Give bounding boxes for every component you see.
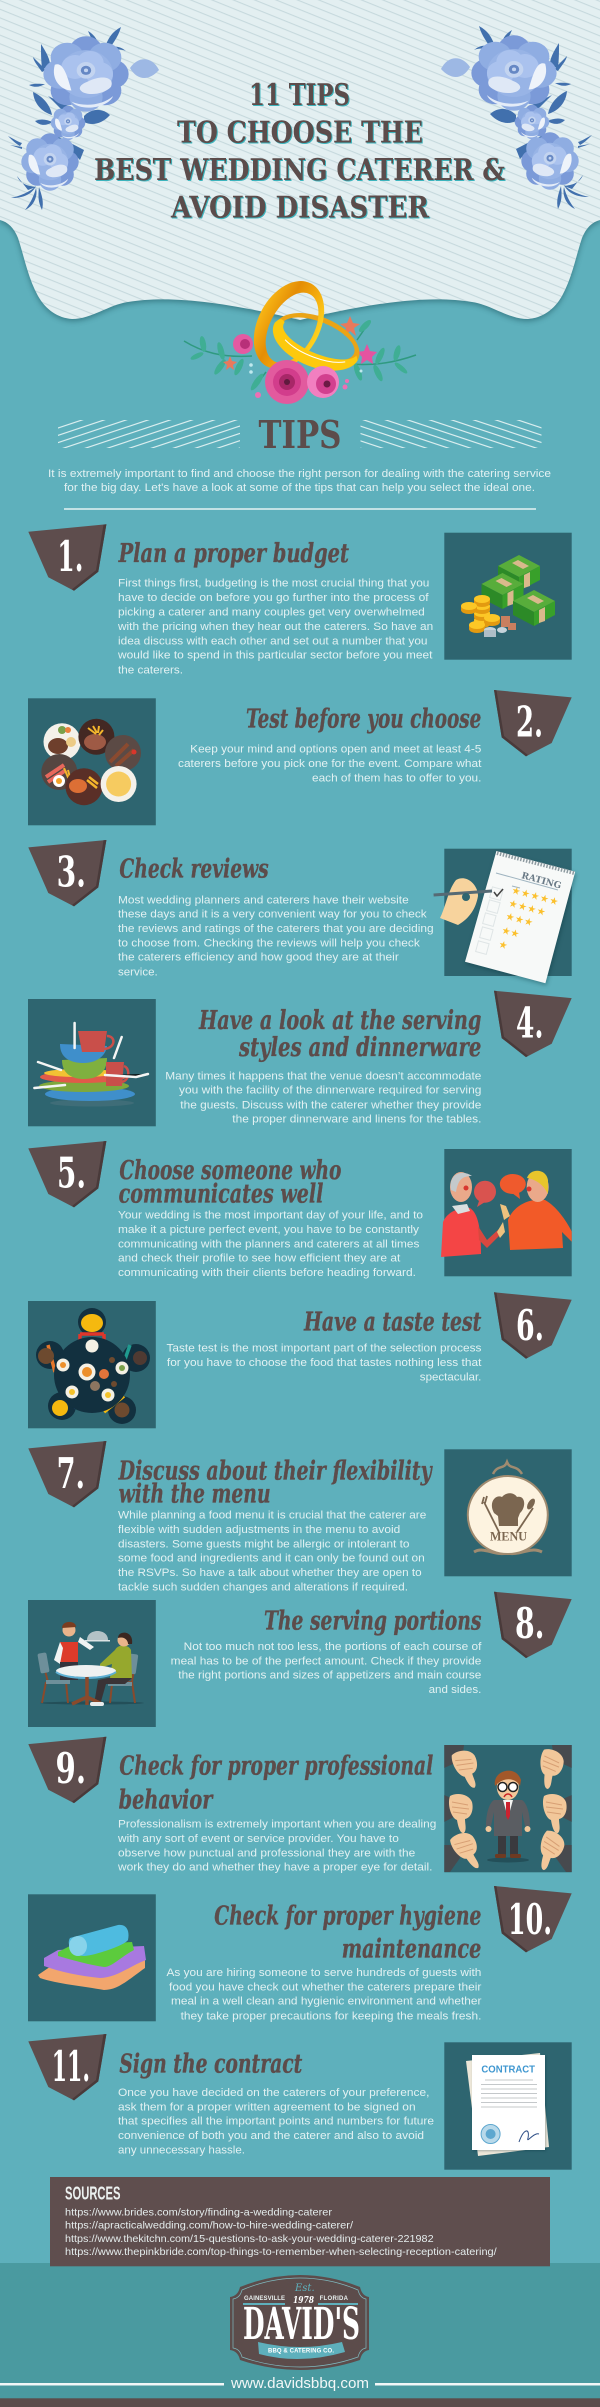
body 11: ask them for a proper written agreement to be signed on — [118, 2101, 416, 2113]
body 10: meal in a well clean and hygienic environment and whether — [171, 1996, 482, 2008]
logo: David's BBQ & Catering Co.: 1978 — [293, 2296, 315, 2306]
header wave panel — [0, 0, 600, 320]
website line: www.davidsbbq.com — [230, 2375, 369, 2392]
body 8: Not too much not too less, the portions of each course of — [184, 1641, 482, 1653]
image: dining table from above — [28, 1301, 156, 1428]
body 10: food you have check out whether the caterers prepare their — [169, 1981, 482, 1993]
heading 4 — [198, 1006, 481, 1063]
body 1: have to decide on before you go further into the process of — [118, 592, 430, 604]
image: menu badge — [444, 1449, 572, 1576]
body 7: disasters. Some guests might be allergic or intolerant to — [118, 1538, 410, 1550]
body 7: tackle such sudden changes and alterations if required. — [118, 1581, 408, 1593]
image: food plates — [28, 698, 156, 825]
heading 7: with the menu — [119, 1480, 271, 1510]
image: contract paper: CONTRACT — [481, 2065, 535, 2076]
image: rating sheet — [434, 849, 575, 983]
tip 3 panel — [28, 840, 575, 983]
body 1 — [117, 578, 433, 676]
title — [94, 78, 505, 225]
image: rating sheet: ★★★ — [504, 911, 534, 929]
logo: David's BBQ & Catering Co.: BBQ & CATERING CO. — [268, 2348, 334, 2354]
body 5: communicating with their clients before heading forward. — [118, 1267, 416, 1279]
heading 3: Check reviews — [119, 855, 269, 885]
heading 7 — [118, 1456, 433, 1510]
body 10: they take proper precautions for keeping the meals fresh. — [181, 2010, 481, 2022]
logo: David's BBQ & Catering Co.: Est. — [294, 2283, 315, 2294]
icon: blue floral left — [8, 27, 159, 210]
body 2: caterers before you pick one for the event. Compare what — [178, 758, 481, 770]
body 11: any unnecessary hassle. — [118, 2144, 245, 2156]
number badge 11: 11. — [52, 2042, 90, 2091]
heading 5: Choose someone who — [119, 1156, 341, 1186]
body 1: with the pricing when they hear out the caterers. So have an — [117, 621, 433, 633]
body 7: the RSVPs. So have a talk about whether they are open to — [118, 1567, 422, 1579]
heading 4: styles and dinnerware — [238, 1033, 481, 1063]
body 10 — [166, 1967, 482, 2022]
title: AVOID DISASTER — [170, 190, 430, 225]
title: 11 TIPS — [249, 78, 350, 113]
body 11: Once you have decided on the caterers of your preference, — [118, 2087, 429, 2099]
tip 7 panel — [28, 1441, 572, 1593]
number badge 5 — [28, 1141, 106, 1207]
body 4: the proper dinnerware and linens for the tables. — [232, 1114, 481, 1126]
number badge 6: 6. — [516, 1301, 544, 1350]
tip 6 panel — [28, 1292, 572, 1428]
sources heading: SOURCES — [65, 2183, 120, 2203]
image: rating sheet: ★★★★ — [507, 898, 547, 919]
number badge 10: 10. — [508, 1895, 552, 1944]
body 5: communicating with the planners and caterers at all times — [118, 1238, 420, 1250]
body 11: that specifies all the important points and numbers for future — [118, 2116, 434, 2128]
intro text: It is extremely important to find and choose the right person for dealing with the catering service — [48, 468, 551, 480]
body 3: to choose from. Checking the reviews will help you check — [118, 937, 420, 949]
number badge 7 — [28, 1441, 106, 1507]
body 6: for you have to choose the food that tastes nothing less that — [167, 1357, 481, 1369]
heading 8: The serving portions — [264, 1606, 482, 1636]
image: money stacks — [444, 533, 572, 660]
tip 1 panel — [28, 524, 572, 676]
image: menu badge: MENU — [490, 1529, 528, 1544]
body 2: each of them has to offer to you. — [312, 773, 481, 785]
number badge 11 — [28, 2034, 106, 2100]
tip 9 panel — [28, 1737, 572, 1874]
footer band — [0, 2263, 600, 2399]
tip 8 panel — [28, 1592, 572, 1727]
source links: https://www.brides.com/story/finding-a-wedding-caterer — [65, 2207, 333, 2219]
body 5: make it a picture perfect event, you have to be constantly — [118, 1224, 420, 1236]
logo: David's BBQ & Catering Co.: GAINESVILLE — [244, 2296, 285, 2302]
heading 4: Have a look at the serving — [198, 1006, 481, 1036]
heading 9: behavior — [119, 1785, 214, 1815]
body 10: As you are hiring someone to serve hundreds of guests with — [166, 1967, 481, 1979]
heading 9: Check for proper professional — [119, 1751, 433, 1781]
body 6 — [166, 1343, 482, 1383]
logo: David's BBQ & Catering Co. — [230, 2275, 369, 2370]
body 7: some food and ingredients and it can only be found out on — [118, 1553, 425, 1565]
intro text: for the big day. Let's have a look at some of the tips that can help you select the ideal one. — [64, 482, 535, 494]
image: rating sheet: ★ — [497, 939, 509, 952]
heading: tips with hatching: TIPS — [258, 413, 342, 458]
tip 4 panel — [28, 991, 572, 1126]
logo: David's BBQ & Catering Co.: DAVID'S — [243, 2299, 360, 2350]
body 9 — [117, 1819, 436, 1874]
body 6: Taste test is the most important part of the selection process — [166, 1343, 482, 1355]
number badge 6 — [494, 1292, 572, 1359]
body 1: the caterers. — [118, 664, 183, 676]
body 11 — [118, 2087, 434, 2156]
body 3: these days and it is a very convenient way for you to check — [118, 909, 427, 921]
intro text — [48, 468, 551, 494]
number badge 2: 2. — [516, 698, 543, 746]
body 1: picking a caterer and many couples get very overwhelmed — [118, 606, 425, 618]
number badge 1: 1. — [57, 532, 83, 581]
body 7 — [118, 1510, 426, 1593]
number badge 8: 8. — [515, 1599, 544, 1648]
image: waiter and guest at table — [28, 1600, 156, 1727]
body 7: While planning a food menu it is crucial that the caterer are — [118, 1510, 426, 1522]
heading 10: Check for proper hygiene — [214, 1901, 481, 1931]
title: TO CHOOSE THE — [177, 116, 423, 151]
heading 5 — [119, 1156, 341, 1209]
heading 5: communicates well — [119, 1179, 323, 1209]
body 1: idea discuss with each other and set out a number that you — [118, 635, 428, 647]
body 7: flexible with sudden adjustments in the menu to avoid — [118, 1524, 400, 1536]
body 1: would like to spend in this particular sector before you meet — [117, 650, 432, 662]
heading 11: Sign the contract — [119, 2050, 302, 2080]
body 6: spectacular. — [420, 1371, 481, 1383]
heading 6: Have a taste test — [303, 1308, 481, 1338]
number badge 3 — [28, 840, 106, 906]
body 4: Many times it happens that the venue doesn’t accommodate — [165, 1070, 481, 1082]
heading: tips with hatching — [58, 420, 542, 448]
image: folded towels — [28, 1894, 156, 2021]
source links: https://www.thepinkbride.com/top-things-to-remember-when-selecting-reception-catering/ — [65, 2246, 497, 2258]
body 9: Professionalism is extremely important when you are dealing — [118, 1819, 436, 1831]
number badge 10 — [494, 1886, 572, 1952]
body 11: convenience of both you and the caterer and also to avoid — [118, 2130, 424, 2142]
number badge 5: 5. — [57, 1148, 86, 1198]
footer bar — [0, 2398, 600, 2407]
tip 11 panel — [28, 2034, 572, 2170]
number badge 9: 9. — [56, 1744, 86, 1793]
body 5: and check their profile to see how efficient they are at — [118, 1253, 400, 1265]
image: rating sheet: RATING — [520, 871, 562, 891]
source links — [65, 2207, 497, 2258]
body 8 — [171, 1641, 482, 1696]
icon: blue floral right — [441, 26, 592, 209]
image: contract paper — [444, 2042, 572, 2170]
body 9: observe how punctual and professional they are with the — [118, 1847, 415, 1859]
body 1: First things first, budgeting is the most crucial thing that you — [118, 578, 429, 590]
body 8: and sides. — [429, 1684, 481, 1696]
body 9: with any sort of event or service provider. You have to — [117, 1833, 399, 1845]
body 8: the right portions and sizes of appetizers and main course — [178, 1670, 481, 1682]
image: rating sheet: ★★ — [500, 925, 520, 941]
body 4: you with the facility of the dinnerware required for serving — [179, 1085, 481, 1097]
body 3: service. — [118, 966, 158, 978]
number badge 1 — [28, 524, 106, 591]
body 5 — [118, 1210, 423, 1279]
body 5: Your wedding is the most important day of your life, and to — [118, 1210, 423, 1222]
heading 10: maintenance — [342, 1935, 481, 1965]
heading 2: Test before you choose — [246, 705, 481, 735]
heading 1: Plan a proper budget — [118, 539, 349, 569]
body 9: work they do and whether they have a proper eye for detail. — [117, 1862, 433, 1874]
source links: https://www.thekitchn.com/15-questions-to-ask-your-wedding-caterer-221982 — [65, 2233, 434, 2245]
body 3: the caterers efficiency and how good they are at their — [118, 952, 399, 964]
number badge 7: 7. — [57, 1449, 85, 1498]
logo: David's BBQ & Catering Co.: FLORIDA — [320, 2296, 349, 2302]
tip 2 panel — [28, 690, 572, 825]
heading 9 — [119, 1751, 433, 1815]
body 4: the guests. Discuss with the caterer whether they provide — [180, 1099, 481, 1111]
tip 10 panel — [28, 1886, 572, 2022]
image: stacked dishes — [28, 999, 156, 1126]
image: rating sheet: ★★★★★ — [510, 885, 559, 908]
number badge 9 — [28, 1737, 106, 1803]
body 3: Most wedding planners and caterers have their website — [118, 894, 409, 906]
number badge 4 — [494, 991, 572, 1057]
number badge 3: 3. — [57, 848, 86, 896]
tip 5 panel — [28, 1141, 572, 1279]
image: two people talking — [441, 1149, 572, 1276]
source links: https://apracticalwedding.com/how-to-hire-wedding-caterer/ — [65, 2220, 353, 2232]
body 2: Keep your mind and options open and meet at least 4-5 — [190, 744, 481, 756]
heading 7: Discuss about their flexibility — [118, 1456, 433, 1486]
image: man with thumbs down — [444, 1745, 572, 1874]
icon: wedding rings with flowers — [184, 269, 416, 404]
body 2 — [178, 744, 481, 785]
body 4 — [165, 1070, 481, 1126]
body 8: meal has to be of the perfect amount. Check if they provide — [171, 1655, 481, 1667]
number badge 8 — [494, 1592, 572, 1658]
number badge 4: 4. — [516, 998, 544, 1048]
body 3: the reviews and ratings of the caterers that you are deciding — [118, 923, 434, 935]
sources box — [50, 2177, 550, 2266]
title: BEST WEDDING CATERER & — [94, 153, 505, 188]
heading 10 — [214, 1901, 481, 1965]
number badge 2 — [494, 690, 572, 756]
body 3 — [118, 894, 434, 978]
divider — [64, 508, 536, 510]
